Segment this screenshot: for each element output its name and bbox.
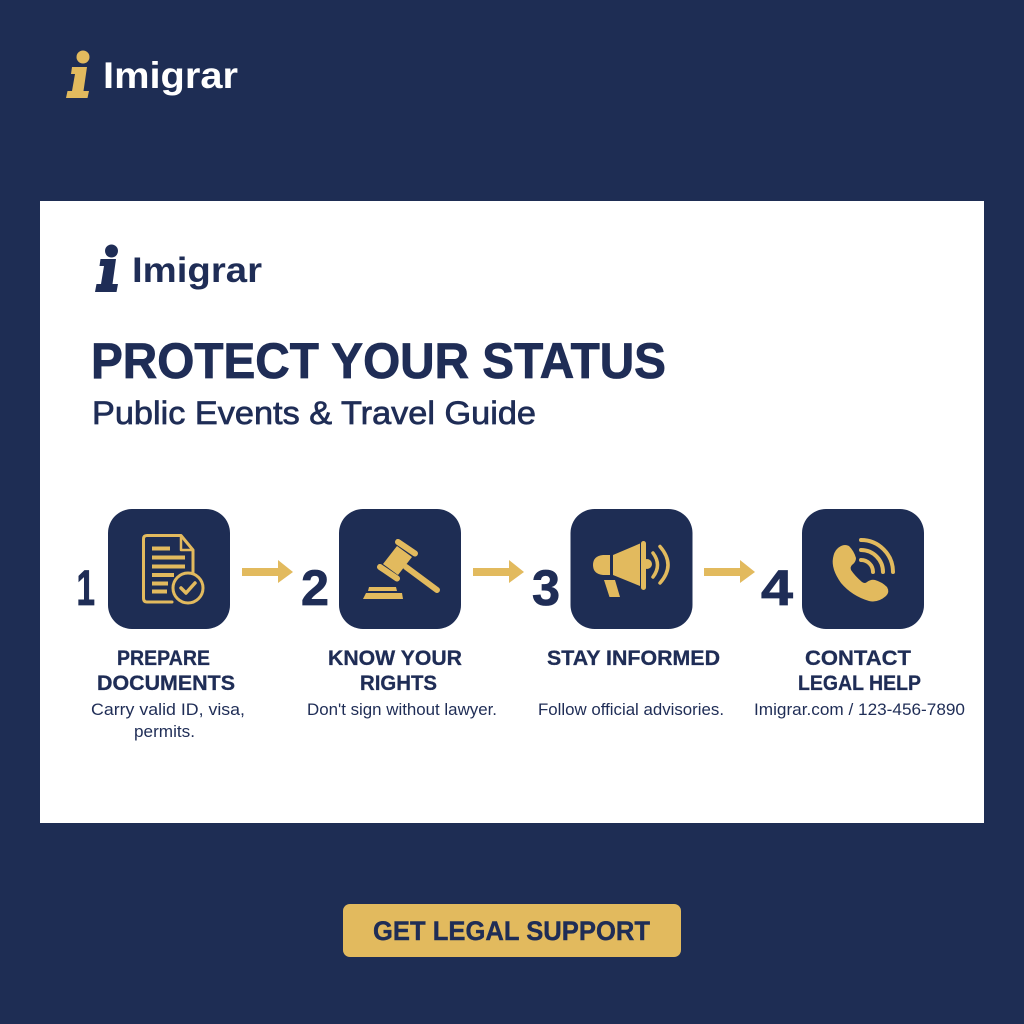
step 2 heading	[328, 646, 462, 695]
step 1 heading	[97, 646, 235, 695]
step 2	[301, 509, 497, 719]
panel: white card	[40, 201, 984, 823]
step 1	[76, 509, 245, 741]
card logo: Imigrar	[132, 251, 262, 290]
step 2 number: 2	[301, 560, 329, 616]
step 1 description: permits.	[134, 723, 195, 741]
step 2 tile with gavel icon	[339, 509, 461, 629]
call to action button: GET LEGAL SUPPORT	[373, 916, 650, 946]
step 4	[754, 509, 965, 719]
subtitle: Public Events & Travel Guide	[92, 395, 536, 431]
step 2 heading: RIGHTS	[360, 671, 437, 695]
step 2 description: Don't sign without lawyer.	[307, 701, 497, 719]
step 1 heading: DOCUMENTS	[97, 671, 235, 695]
step 1 tile with document icon	[108, 509, 230, 629]
step 4 description: Imigrar.com / 123-456-7890	[754, 701, 965, 719]
step 4 heading	[798, 646, 921, 695]
step 1 description	[91, 701, 245, 741]
step 3 heading: STAY INFORMED	[547, 646, 720, 670]
step 2 heading: KNOW YOUR	[328, 646, 462, 670]
step 3 description: Follow official advisories.	[538, 701, 724, 719]
step 3 number: 3	[532, 560, 560, 616]
header logo: Imigrar	[103, 55, 238, 96]
call to action button	[343, 904, 681, 957]
step 1 number: 1	[76, 560, 95, 616]
step 4 tile with phone icon	[802, 509, 924, 629]
step 1 description: Carry valid ID, visa,	[91, 701, 245, 719]
header logo	[66, 50, 238, 98]
step 3 tile with megaphone icon	[570, 509, 692, 629]
card logo	[95, 244, 262, 292]
title: PROTECT YOUR STATUS	[91, 333, 666, 389]
step 4 heading: LEGAL HELP	[798, 671, 921, 695]
arrow 2	[473, 560, 524, 583]
step 4 number: 4	[761, 560, 793, 616]
step 1 heading: PREPARE	[117, 646, 210, 670]
step 4 heading: CONTACT	[805, 646, 911, 670]
arrow 1	[242, 560, 293, 583]
arrow 3	[704, 560, 755, 583]
step 3	[532, 509, 724, 719]
